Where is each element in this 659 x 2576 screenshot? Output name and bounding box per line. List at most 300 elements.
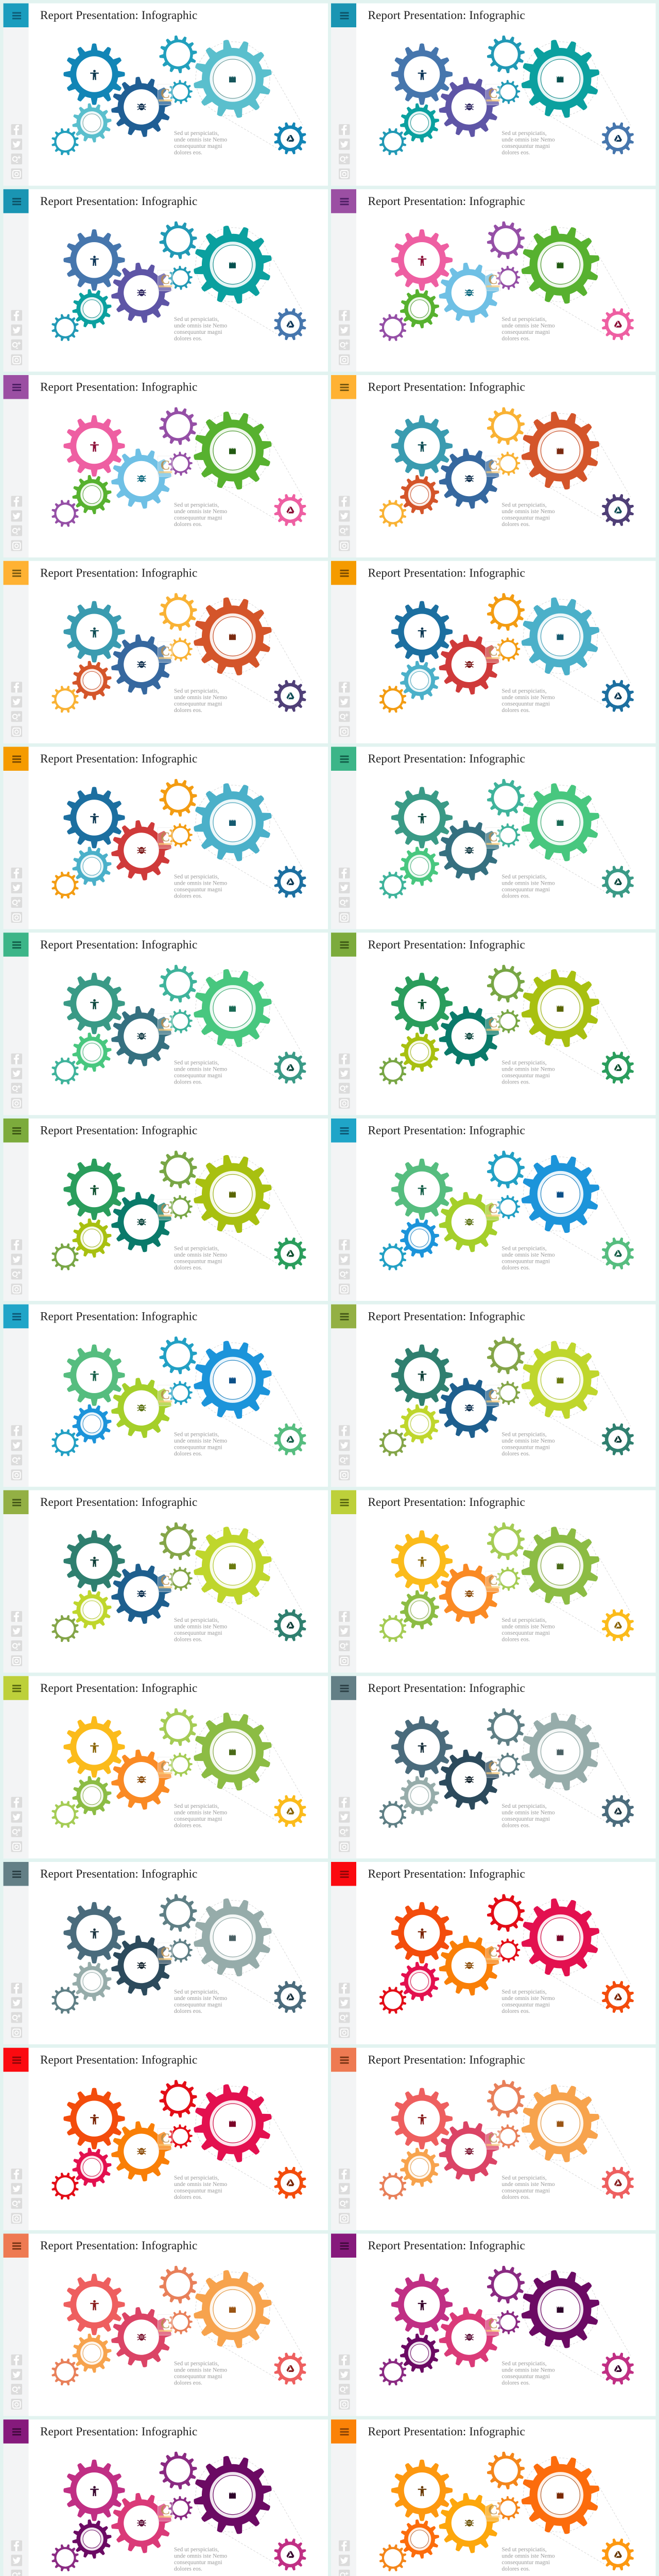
text block: unde omnis iste Nemo bbox=[174, 2367, 227, 2374]
gear: recycle bbox=[598, 304, 638, 344]
panel background bbox=[3, 1304, 328, 1487]
text block: consequuntur magni bbox=[174, 1444, 222, 1450]
text block: consequuntur magni bbox=[501, 1630, 550, 1636]
panel background bbox=[331, 1676, 656, 1858]
title: Report Presentation: Infographic bbox=[40, 752, 197, 766]
title: Report Presentation: Infographic bbox=[368, 566, 525, 580]
gear: ringed small bbox=[397, 2517, 442, 2562]
text block: Sed ut perspiciatis, bbox=[174, 502, 219, 508]
social icons bbox=[339, 496, 350, 551]
panel background bbox=[331, 189, 656, 371]
social icons bbox=[11, 2168, 22, 2224]
gear: person bbox=[391, 2460, 453, 2521]
gear: bottom small bbox=[48, 682, 82, 716]
watermark: C bbox=[488, 457, 498, 473]
text block: unde omnis iste Nemo bbox=[501, 2553, 555, 2559]
text block: dolores eos. bbox=[501, 2008, 530, 2014]
gear: bug bbox=[108, 1560, 175, 1628]
gear: recycle bbox=[598, 2349, 638, 2388]
gear: top small bbox=[157, 219, 199, 261]
text block: Sed ut perspiciatis, bbox=[174, 1803, 219, 1809]
gear: bottom small bbox=[376, 125, 410, 159]
gear: ringed small bbox=[70, 2145, 114, 2190]
text block: unde omnis iste Nemo bbox=[174, 880, 227, 887]
gear: person bbox=[63, 787, 125, 849]
slide 21 bbox=[3, 1862, 328, 2044]
text block: consequuntur magni bbox=[174, 1259, 222, 1265]
watermark: C bbox=[161, 1201, 170, 1216]
gear: recycle bbox=[598, 862, 638, 902]
menu header block bbox=[3, 189, 29, 213]
gear: top small bbox=[484, 962, 527, 1005]
gear: bug bbox=[108, 73, 175, 141]
text block: dolores eos. bbox=[501, 1451, 530, 1457]
social icons bbox=[11, 1611, 22, 1666]
watermark bbox=[485, 2500, 500, 2521]
watermark: C bbox=[161, 829, 170, 844]
watermark bbox=[485, 642, 500, 663]
gear: person bbox=[391, 415, 453, 477]
gear: bug bbox=[436, 1932, 502, 1999]
gear: large factory bbox=[187, 590, 279, 682]
title: Report Presentation: Infographic bbox=[40, 1310, 197, 1323]
panel background bbox=[3, 1676, 328, 1858]
text block: dolores eos. bbox=[174, 707, 202, 714]
text block: Sed ut perspiciatis, bbox=[174, 2361, 219, 2367]
gear: person bbox=[391, 601, 453, 663]
panel background bbox=[331, 561, 656, 743]
gear: recycle bbox=[598, 1419, 638, 1460]
watermark: C bbox=[488, 2502, 498, 2517]
gear: middle small bbox=[168, 1938, 193, 1963]
gear: ringed small bbox=[70, 658, 114, 703]
gear: recycle bbox=[598, 1605, 638, 1645]
gear: ringed small bbox=[397, 1587, 442, 1632]
slide 24 bbox=[331, 2048, 656, 2230]
gear: person bbox=[63, 1716, 125, 1777]
watermark bbox=[158, 84, 173, 105]
gear: bottom small bbox=[48, 2169, 82, 2203]
gear: bottom small bbox=[376, 2169, 410, 2203]
title: Report Presentation: Infographic bbox=[368, 2425, 525, 2438]
menu header block bbox=[331, 1862, 356, 1886]
text block: dolores eos. bbox=[501, 707, 530, 714]
text block: unde omnis iste Nemo bbox=[501, 1066, 555, 1072]
title: Report Presentation: Infographic bbox=[40, 9, 197, 22]
title: Report Presentation: Infographic bbox=[368, 195, 525, 208]
menu header block bbox=[331, 933, 356, 957]
watermark bbox=[158, 456, 173, 477]
text block: dolores eos. bbox=[174, 1079, 202, 1085]
gear: recycle bbox=[270, 2349, 310, 2388]
text block: dolores eos. bbox=[174, 893, 202, 900]
gear: large factory bbox=[187, 2077, 279, 2169]
text block: consequuntur magni bbox=[174, 2002, 222, 2008]
slide 23 bbox=[3, 2048, 328, 2230]
title: Report Presentation: Infographic bbox=[368, 1124, 525, 1138]
gear: middle small bbox=[495, 637, 521, 662]
slide 2 bbox=[331, 3, 656, 185]
gear: recycle bbox=[598, 1791, 638, 1831]
gear: top small bbox=[484, 1334, 527, 1377]
gear: bug bbox=[436, 2303, 502, 2371]
gear: bug bbox=[436, 73, 502, 141]
social icons bbox=[11, 1797, 22, 1852]
gear: top small bbox=[157, 1706, 199, 1748]
gear: top small bbox=[484, 1892, 527, 1934]
menu header block bbox=[331, 1490, 356, 1514]
social icons bbox=[339, 1611, 350, 1666]
text block: dolores eos. bbox=[174, 1822, 202, 1828]
text block: consequuntur magni bbox=[174, 143, 222, 149]
connector lines bbox=[523, 1157, 630, 1263]
gear: bug bbox=[436, 1189, 502, 1256]
watermark bbox=[485, 827, 500, 848]
text block: dolores eos. bbox=[174, 1451, 202, 1457]
menu header block bbox=[331, 1676, 356, 1700]
text block: unde omnis iste Nemo bbox=[174, 1252, 227, 1258]
text block: Sed ut perspiciatis, bbox=[501, 1060, 547, 1066]
connector lines bbox=[523, 1343, 630, 1449]
gear: top small bbox=[157, 591, 199, 633]
slide 17 bbox=[3, 1490, 328, 1672]
title: Report Presentation: Infographic bbox=[368, 2239, 525, 2252]
gear: person bbox=[63, 2460, 125, 2521]
gear: middle small bbox=[168, 637, 193, 662]
text block: unde omnis iste Nemo bbox=[501, 2367, 555, 2374]
panel background bbox=[3, 1490, 328, 1672]
text block: unde omnis iste Nemo bbox=[501, 2181, 555, 2188]
menu header block bbox=[3, 3, 29, 27]
gear: large factory bbox=[515, 590, 606, 682]
menu header block bbox=[331, 189, 356, 213]
gear: recycle bbox=[598, 2534, 638, 2574]
slide 8 bbox=[331, 561, 656, 743]
text block: Sed ut perspiciatis, bbox=[501, 1431, 547, 1437]
connector lines bbox=[196, 42, 303, 148]
connector lines bbox=[196, 1900, 303, 2006]
gear: large factory bbox=[515, 1892, 606, 1983]
panel background bbox=[331, 747, 656, 929]
gear: recycle bbox=[270, 1419, 310, 1460]
gear: large factory bbox=[515, 1706, 606, 1798]
gear: bug bbox=[436, 631, 502, 698]
text block: dolores eos. bbox=[501, 521, 530, 528]
text block: Sed ut perspiciatis, bbox=[501, 2175, 547, 2181]
social icons bbox=[339, 1054, 350, 1109]
title: Report Presentation: Infographic bbox=[40, 566, 197, 580]
gear: middle small bbox=[495, 451, 521, 477]
gear: ringed small bbox=[70, 844, 114, 889]
gear: recycle bbox=[598, 1047, 638, 1088]
watermark bbox=[485, 1571, 500, 1592]
text block: dolores eos. bbox=[501, 1079, 530, 1085]
gear: top small bbox=[484, 2449, 527, 2492]
gear: ringed small bbox=[70, 472, 114, 517]
slide 9 bbox=[3, 747, 328, 929]
gear: large factory bbox=[515, 405, 606, 496]
gear: middle small bbox=[168, 451, 193, 477]
gear: top small bbox=[484, 405, 527, 447]
text block: dolores eos. bbox=[174, 2566, 202, 2572]
text block: consequuntur magni bbox=[501, 1259, 550, 1265]
gear: ringed small bbox=[70, 2331, 114, 2376]
gear: bottom small bbox=[48, 125, 82, 159]
watermark: C bbox=[488, 2130, 498, 2145]
gear: bug bbox=[108, 1189, 175, 1256]
menu header block bbox=[331, 1304, 356, 1328]
gear: middle small bbox=[495, 1194, 521, 1220]
watermark bbox=[158, 1199, 173, 1220]
watermark bbox=[158, 1385, 173, 1406]
watermark bbox=[158, 1013, 173, 1034]
slide 1 bbox=[3, 3, 328, 185]
gear: recycle bbox=[270, 304, 310, 344]
gear: middle small bbox=[495, 1752, 521, 1777]
text block: dolores eos. bbox=[501, 1822, 530, 1828]
watermark bbox=[158, 1571, 173, 1592]
menu header block bbox=[3, 2048, 29, 2072]
gear: person bbox=[391, 1159, 453, 1220]
text block: Sed ut perspiciatis, bbox=[501, 2361, 547, 2367]
title: Report Presentation: Infographic bbox=[368, 1867, 525, 1880]
gear: bug bbox=[108, 1746, 175, 1814]
text block: unde omnis iste Nemo bbox=[174, 137, 227, 143]
text block: consequuntur magni bbox=[174, 329, 222, 335]
gear: ringed small bbox=[397, 1773, 442, 1818]
text block: unde omnis iste Nemo bbox=[174, 1624, 227, 1630]
menu header block bbox=[3, 561, 29, 585]
gear: ringed small bbox=[70, 1959, 114, 2004]
gear: middle small bbox=[168, 1380, 193, 1405]
gear: person bbox=[63, 601, 125, 663]
gear: bug bbox=[108, 631, 175, 698]
social icons bbox=[11, 1982, 22, 2038]
watermark: C bbox=[488, 1015, 498, 1030]
slide 22 bbox=[331, 1862, 656, 2044]
gear: ringed small bbox=[397, 1030, 442, 1075]
gear: large factory bbox=[515, 1148, 606, 1240]
watermark bbox=[485, 2129, 500, 2149]
gear: bottom small bbox=[376, 497, 410, 530]
gear: bug bbox=[108, 1374, 175, 1442]
social icons bbox=[339, 2354, 350, 2410]
text block: unde omnis iste Nemo bbox=[501, 137, 555, 143]
watermark: C bbox=[488, 86, 498, 101]
gear: top small bbox=[484, 1520, 527, 1563]
menu header block bbox=[331, 2048, 356, 2072]
gear: bottom small bbox=[48, 2355, 82, 2389]
gear: bug bbox=[108, 445, 175, 512]
slide 26 bbox=[331, 2234, 656, 2416]
watermark: C bbox=[488, 1944, 498, 1960]
watermark: C bbox=[161, 457, 170, 473]
gear: top small bbox=[157, 2449, 199, 2492]
gear: top small bbox=[157, 776, 199, 819]
gear: middle small bbox=[168, 1194, 193, 1220]
gear: top small bbox=[157, 1520, 199, 1563]
gear: bottom small bbox=[48, 1426, 82, 1460]
slide 27 bbox=[3, 2419, 328, 2576]
gear: middle small bbox=[168, 1009, 193, 1034]
gear: bottom small bbox=[48, 1798, 82, 1832]
menu header block bbox=[3, 747, 29, 771]
title: Report Presentation: Infographic bbox=[368, 1310, 525, 1323]
gear: ringed small bbox=[397, 1959, 442, 2004]
slide 3 bbox=[3, 189, 328, 371]
gear: middle small bbox=[168, 79, 193, 105]
text block: Sed ut perspiciatis, bbox=[501, 130, 547, 137]
gear: bottom small bbox=[376, 2541, 410, 2575]
gear: ringed small bbox=[397, 2331, 442, 2376]
text block: unde omnis iste Nemo bbox=[501, 1252, 555, 1258]
watermark: C bbox=[161, 86, 170, 101]
slide 14 bbox=[331, 1118, 656, 1301]
gear: recycle bbox=[270, 1791, 310, 1831]
panel background bbox=[331, 933, 656, 1115]
slide 19 bbox=[3, 1676, 328, 1858]
panel background bbox=[3, 1862, 328, 2044]
title: Report Presentation: Infographic bbox=[368, 2053, 525, 2066]
text block: Sed ut perspiciatis, bbox=[501, 874, 547, 880]
gear: large factory bbox=[515, 2449, 606, 2541]
text block: consequuntur magni bbox=[501, 1444, 550, 1450]
gear: bottom small bbox=[376, 682, 410, 716]
text block: Sed ut perspiciatis, bbox=[174, 2175, 219, 2181]
gear: top small bbox=[157, 1148, 199, 1191]
text block: Sed ut perspiciatis, bbox=[501, 502, 547, 508]
text block: consequuntur magni bbox=[501, 1816, 550, 1822]
gear: person bbox=[391, 1345, 453, 1406]
title: Report Presentation: Infographic bbox=[40, 1682, 197, 1695]
gear: top small bbox=[157, 405, 199, 447]
gear: bottom small bbox=[376, 1240, 410, 1274]
gear: bug bbox=[108, 2117, 175, 2185]
text block: dolores eos. bbox=[174, 335, 202, 342]
text block: dolores eos. bbox=[501, 893, 530, 900]
text block: dolores eos. bbox=[501, 150, 530, 156]
text block: unde omnis iste Nemo bbox=[174, 1066, 227, 1072]
text block: dolores eos. bbox=[501, 2380, 530, 2386]
connector lines bbox=[523, 1715, 630, 1821]
watermark bbox=[158, 1757, 173, 1777]
text block: unde omnis iste Nemo bbox=[501, 1624, 555, 1630]
menu header block bbox=[331, 1118, 356, 1143]
connector lines bbox=[196, 2272, 303, 2378]
gear: recycle bbox=[270, 118, 310, 158]
gear: bug bbox=[108, 2489, 175, 2557]
text block: consequuntur magni bbox=[174, 2374, 222, 2380]
watermark: C bbox=[488, 2316, 498, 2331]
watermark bbox=[485, 270, 500, 291]
gear: large factory bbox=[187, 2263, 279, 2355]
gear: middle small bbox=[495, 1938, 521, 1963]
gear: recycle bbox=[598, 118, 638, 158]
social icons bbox=[339, 1240, 350, 1294]
slide 12 bbox=[331, 933, 656, 1115]
gear: person bbox=[391, 1716, 453, 1777]
panel background bbox=[3, 375, 328, 557]
panel background bbox=[3, 3, 328, 185]
gear: bottom small bbox=[376, 1984, 410, 2017]
gear: middle small bbox=[495, 2496, 521, 2521]
connector lines bbox=[523, 2272, 630, 2378]
gear: top small bbox=[484, 219, 527, 261]
menu header block bbox=[3, 2234, 29, 2258]
gear: bug bbox=[436, 1560, 502, 1628]
gear: large factory bbox=[187, 1892, 279, 1983]
social icons bbox=[11, 868, 22, 923]
gear: bug bbox=[436, 445, 502, 512]
menu header block bbox=[3, 2419, 29, 2444]
watermark: C bbox=[161, 1759, 170, 1774]
gear: ringed small bbox=[70, 1216, 114, 1260]
panel background bbox=[331, 2048, 656, 2230]
watermark: C bbox=[161, 1573, 170, 1588]
gear: ringed small bbox=[397, 286, 442, 331]
slide 7 bbox=[3, 561, 328, 743]
text block: unde omnis iste Nemo bbox=[174, 694, 227, 701]
text block: unde omnis iste Nemo bbox=[501, 323, 555, 329]
social icons bbox=[339, 2540, 350, 2576]
text block: Sed ut perspiciatis, bbox=[174, 1989, 219, 1995]
watermark: C bbox=[488, 1573, 498, 1588]
title: Report Presentation: Infographic bbox=[40, 1124, 197, 1138]
gear: top small bbox=[157, 2078, 199, 2120]
gear: recycle bbox=[270, 490, 310, 530]
watermark bbox=[158, 270, 173, 291]
text block: unde omnis iste Nemo bbox=[501, 1809, 555, 1816]
menu header block bbox=[331, 561, 356, 585]
gear: middle small bbox=[495, 1566, 521, 1591]
gear: recycle bbox=[598, 2163, 638, 2203]
text block: dolores eos. bbox=[501, 1265, 530, 1271]
watermark: C bbox=[161, 2130, 170, 2145]
gear: person bbox=[391, 43, 453, 105]
slide 6 bbox=[331, 375, 656, 557]
gear: bottom small bbox=[48, 2541, 82, 2575]
gear: ringed small bbox=[397, 844, 442, 889]
text block: Sed ut perspiciatis, bbox=[501, 1617, 547, 1623]
text block: consequuntur magni bbox=[501, 515, 550, 521]
text block: Sed ut perspiciatis, bbox=[174, 316, 219, 323]
gear: large factory bbox=[187, 1706, 279, 1798]
gear: top small bbox=[484, 776, 527, 819]
gear: top small bbox=[484, 2078, 527, 2120]
social icons bbox=[339, 868, 350, 923]
menu header block bbox=[3, 1118, 29, 1143]
watermark bbox=[158, 642, 173, 663]
gear: bug bbox=[108, 1003, 175, 1070]
panel background bbox=[3, 2419, 328, 2576]
text block: Sed ut perspiciatis, bbox=[501, 1803, 547, 1809]
text block: dolores eos. bbox=[174, 2380, 202, 2386]
gear: middle small bbox=[168, 2310, 193, 2335]
connector lines bbox=[523, 1529, 630, 1635]
gear: recycle bbox=[270, 1233, 310, 1274]
social icons bbox=[339, 310, 350, 365]
connector lines bbox=[196, 2458, 303, 2564]
gear: large factory bbox=[515, 1334, 606, 1426]
gear: top small bbox=[484, 2263, 527, 2306]
text block: Sed ut perspiciatis, bbox=[174, 874, 219, 880]
gear: middle small bbox=[495, 823, 521, 848]
gear: large factory bbox=[515, 962, 606, 1054]
gear: recycle bbox=[598, 676, 638, 716]
connector lines bbox=[196, 413, 303, 519]
panel background bbox=[331, 1862, 656, 2044]
text block: Sed ut perspiciatis, bbox=[501, 316, 547, 323]
